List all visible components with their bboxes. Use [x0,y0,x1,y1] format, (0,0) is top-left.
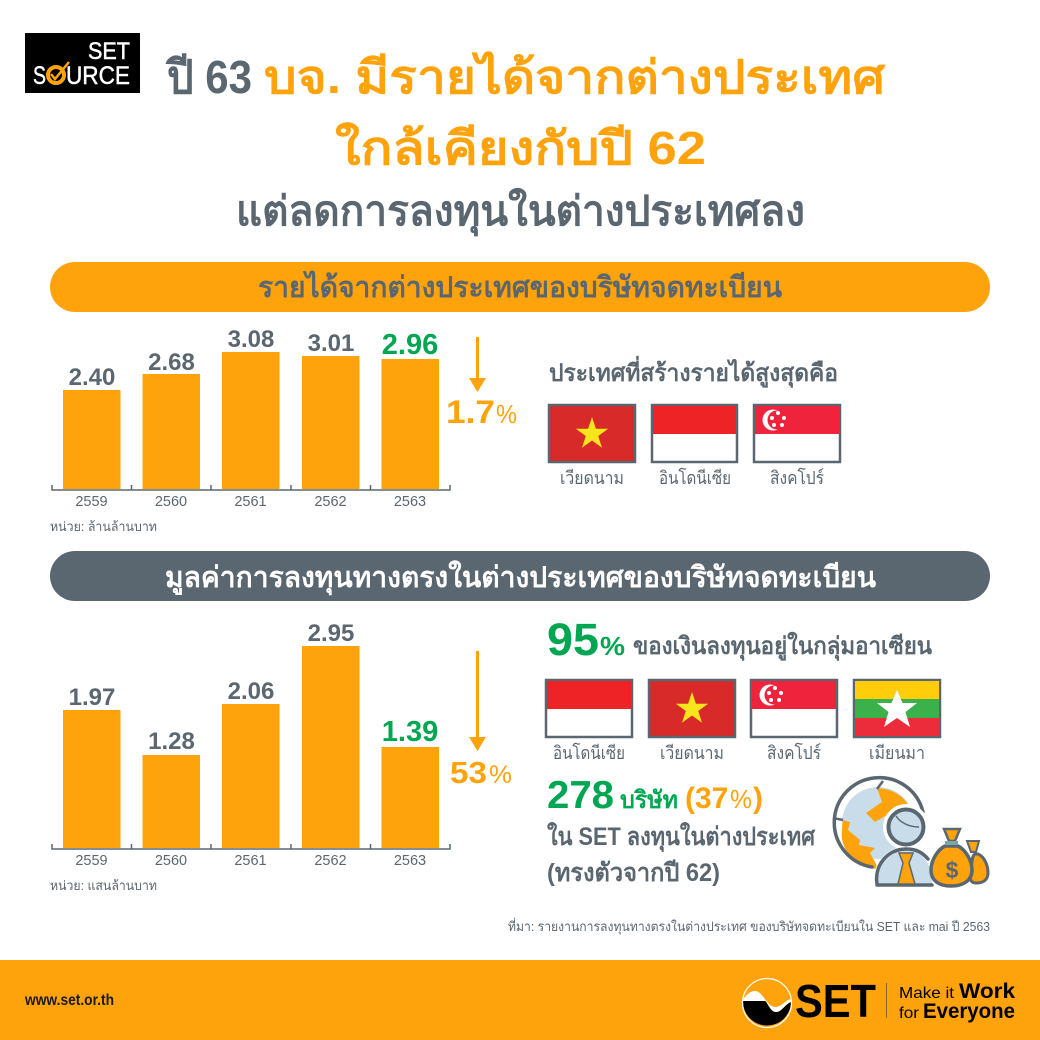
bar chart: foreign income: 2.68 [148,349,195,376]
slogan: for [899,1005,920,1022]
bar chart: foreign income: 2.40 [69,364,115,391]
flag: Singapore [751,680,837,763]
slogan: Everyone [923,1000,1015,1023]
bar chart: direct investment: 1.39 [382,716,438,748]
stat: 278 companies: ) [753,782,763,815]
title [165,51,886,237]
slogan: Make it [899,985,955,1002]
footer band [0,960,1040,1040]
callout: 53%: % [489,761,512,789]
source note: ที่มา: รายงานการลงทุนทางตรงในต่างประเทศ ของบริษัทจดทะเบียนใน SET และ mai ปี 2563 [508,918,990,935]
flag: Vietnam [649,680,735,763]
bar chart: direct investment: 2561 [234,853,267,869]
footer url: www.set.or.th [24,992,114,1009]
bar chart: direct investment: 2563 [394,853,426,869]
stat: 95% in ASEAN: % [600,631,625,661]
callout: 1.7%: % [496,399,517,429]
stat: 278 companies: (37 [685,782,728,815]
title: แต่ลดการลงทุนในต่างประเทศลง [236,187,805,237]
flag: Myanmar: เมียนมา [869,743,925,763]
section header: foreign income: รายได้จากต่างประเทศของบริษัทจดทะเบียน [258,270,782,304]
bar chart: direct investment: 2560 [155,853,187,869]
logo: SET Source: URCE [66,62,130,90]
stat: 278 companies: 278 [547,774,614,817]
flag: Myanmar [854,680,940,763]
bar chart: foreign income: 2559 [75,494,108,510]
bar chart: foreign income: 3.08 [228,326,274,353]
title: ใกล้เคียงกับปี 62 [335,121,706,174]
bar chart: direct investment: 1.97 [69,684,115,711]
stat: 278 companies: % [730,784,752,814]
section header: direct investment: มูลค่าการลงทุนทางตรงในต่างประเทศของบริษัทจดทะเบียน [165,560,876,595]
slogan [899,980,1015,1023]
flag: Singapore [754,405,840,488]
text block: SET investing abroad: ใน SET ลงทุนในต่างประเทศ [547,821,816,853]
unit note: chart 2: หน่วย: แสนล้านบาท [50,878,157,893]
bar chart: direct investment: 2562 [314,853,347,869]
logo: SET Source [25,33,140,93]
flag: Indonesia: อินโดนีเซีย [553,742,625,763]
logo: SET Source: S [33,62,46,90]
section header: direct investment [50,551,990,601]
bar chart: direct investment: 2.06 [228,678,274,705]
flag: Indonesia [546,680,632,763]
bar chart: direct investment: 2.95 [308,620,354,647]
stat: 278 companies: บริษัท [620,787,678,814]
logo: SET Source: SET [88,38,130,65]
bar chart: direct investment [52,620,450,869]
bar chart: foreign income: 2562 [314,494,347,510]
text block: SET investing abroad [547,821,816,887]
heading: top income countries: ประเทศที่สร้างรายได้สูงสุดคือ [549,355,838,389]
callout: 1.7% [446,394,517,430]
callout: 53%: 53 [450,755,487,790]
bar chart: foreign income: 2561 [234,494,267,510]
divider [886,983,887,1018]
unit note: chart 1: หน่วย: ล้านล้านบาท [50,519,157,534]
callout: 1.7%: 1.7 [446,394,495,430]
flag: Indonesia [652,405,737,488]
logo: SET: SET [795,975,876,1027]
arrow: income decline [469,337,486,392]
bar chart: foreign income: 2563 [394,494,426,510]
flag: Vietnam [549,405,635,488]
bar chart: direct investment: 2559 [75,853,108,869]
arrow: investment decline [469,651,486,751]
stat: 95% in ASEAN: ของเงินลงทุนอยู่ในกลุ่มอาเซียน [633,631,933,662]
bar chart: direct investment: 1.28 [148,728,195,755]
stat: 95% in ASEAN [547,614,933,665]
bar chart: foreign income [52,326,450,510]
title: บจ. มีรายได้จากต่างประเทศ [264,51,886,103]
flag: Singapore: สิงคโปร์ [770,467,824,488]
logo: SET [742,975,876,1028]
flag: Singapore: สิงคโปร์ [767,742,821,763]
flag: Indonesia: อินโดนีเซีย [659,467,731,488]
stat: 278 companies [547,774,763,817]
callout: 53% [450,755,512,790]
slogan: Work [959,980,1015,1003]
stat: 95% in ASEAN: 95 [547,614,599,665]
bar chart: foreign income: 2.96 [382,329,438,361]
icon: globe, businessperson and money bags: $ [946,857,959,883]
bar chart: foreign income: 3.01 [308,330,354,357]
text block: SET investing abroad: (ทรงตัวจากปี 62) [547,859,720,887]
section header: foreign income [50,262,990,312]
title: ปี 63 [165,51,252,103]
flag: Vietnam: เวียดนาม [560,468,624,488]
bar chart: foreign income: 2560 [155,494,187,510]
flag: Vietnam: เวียดนาม [660,743,724,763]
icon: globe, businessperson and money bags [833,778,988,886]
